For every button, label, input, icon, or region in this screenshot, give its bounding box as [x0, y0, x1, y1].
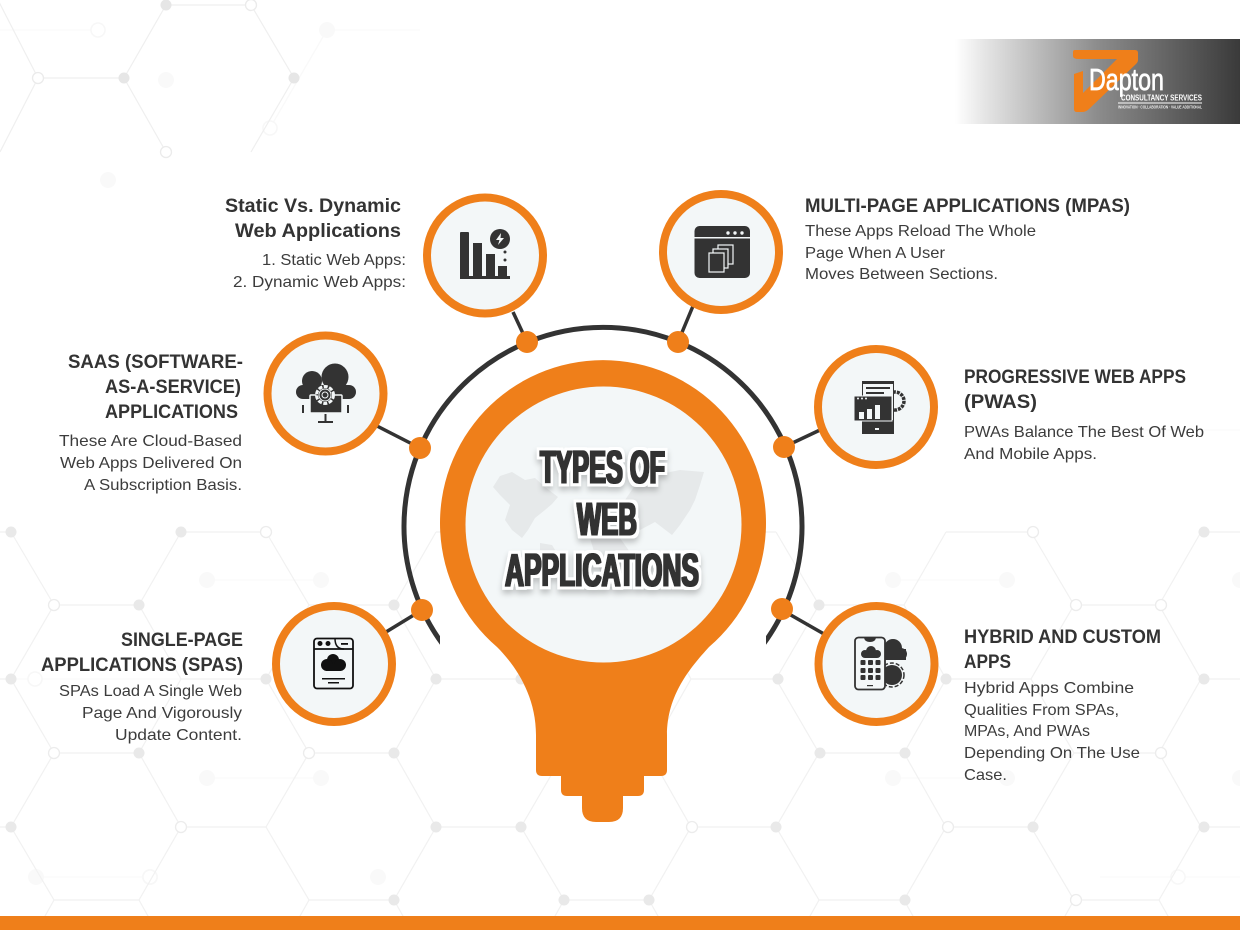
text: multi-page: These Apps Reload The Whole — [805, 223, 1036, 240]
icon: phone with cloud and gear — [855, 638, 907, 690]
circle: static vs dynamic — [427, 198, 543, 314]
title — [505, 441, 699, 596]
icon: browser with pages — [694, 226, 750, 278]
icon: page with cloud — [314, 638, 353, 688]
text: hybrid: Hybrid Apps Combine — [964, 680, 1134, 697]
logo panel: INNOVATION · COLLABORATION · VALUE ADDITIONAL — [1118, 104, 1202, 110]
text: progressive web apps: (PWAS) — [964, 391, 1037, 413]
text: hybrid: MPAs, And PWAs — [964, 723, 1090, 740]
text: single-page: Page And Vigorously — [82, 705, 242, 722]
text: single-page: APPLICATIONS (SPAS) — [41, 654, 243, 676]
text: hybrid — [964, 626, 1161, 784]
text: multi-page: MULTI-PAGE APPLICATIONS (MPAS) — [805, 195, 1130, 217]
text: static vs dynamic — [225, 195, 406, 291]
text: static vs dynamic: Web Applications — [235, 220, 401, 242]
text: progressive web apps — [964, 366, 1204, 463]
text: hybrid: Depending On The Use — [964, 745, 1140, 762]
icon: bar chart with bolt — [460, 229, 510, 279]
icon: cloud with monitor and gear — [296, 364, 356, 423]
text: hybrid: APPS — [964, 651, 1011, 673]
text: saas: A Subscription Basis. — [84, 477, 242, 494]
text: hybrid: HYBRID AND CUSTOM — [964, 626, 1161, 648]
light bulb — [440, 360, 766, 822]
text: static vs dynamic: 1. Static Web Apps: — [262, 252, 406, 269]
dark ring around bulb — [404, 327, 802, 646]
logo panel — [955, 39, 1240, 124]
circle: hybrid — [818, 606, 934, 722]
text: saas: APPLICATIONS — [105, 401, 238, 423]
text: single-page: SPAs Load A Single Web — [59, 683, 242, 700]
connector nodes — [409, 331, 795, 621]
connectors — [377, 306, 824, 634]
text: multi-page: Moves Between Sections. — [805, 266, 998, 283]
text: saas: These Are Cloud-Based — [59, 433, 242, 450]
text: hybrid: Case. — [964, 767, 1007, 784]
circle: single-page — [276, 606, 392, 722]
icon: phone with window and gear — [854, 381, 904, 434]
logo wordmark: Dapton — [1089, 62, 1164, 97]
logo tagline: CONSULTANCY SERVICES — [1121, 94, 1203, 102]
bottom bar — [0, 916, 1240, 930]
title: WEB — [577, 493, 637, 545]
circle: multi-page — [663, 194, 779, 310]
circle: saas — [268, 336, 384, 452]
circle: progressive web apps — [818, 349, 934, 465]
text: multi-page: Page When A User — [805, 245, 946, 262]
title: APPLICATIONS — [505, 544, 699, 596]
world map watermark — [493, 470, 704, 588]
text: hybrid: Qualities From SPAs, — [964, 702, 1119, 719]
text: saas: AS-A-SERVICE) — [105, 376, 241, 398]
text: single-page — [41, 629, 243, 744]
text: progressive web apps: And Mobile Apps. — [964, 446, 1097, 463]
logo mark — [1073, 50, 1138, 112]
text: static vs dynamic: Static Vs. Dynamic — [225, 195, 401, 217]
text: single-page: SINGLE-PAGE — [121, 629, 243, 651]
text: single-page: Update Content. — [115, 727, 242, 744]
text: saas — [59, 351, 243, 494]
text: progressive web apps: PWAs Balance The Best Of Web — [964, 424, 1204, 441]
text: multi-page — [805, 195, 1130, 283]
text: saas: Web Apps Delivered On — [60, 455, 242, 472]
text: progressive web apps: PROGRESSIVE WEB APPS — [964, 366, 1186, 388]
title: TYPES OF — [540, 441, 665, 493]
text: saas: SAAS (SOFTWARE- — [68, 351, 243, 373]
text: static vs dynamic: 2. Dynamic Web Apps: — [233, 274, 406, 291]
